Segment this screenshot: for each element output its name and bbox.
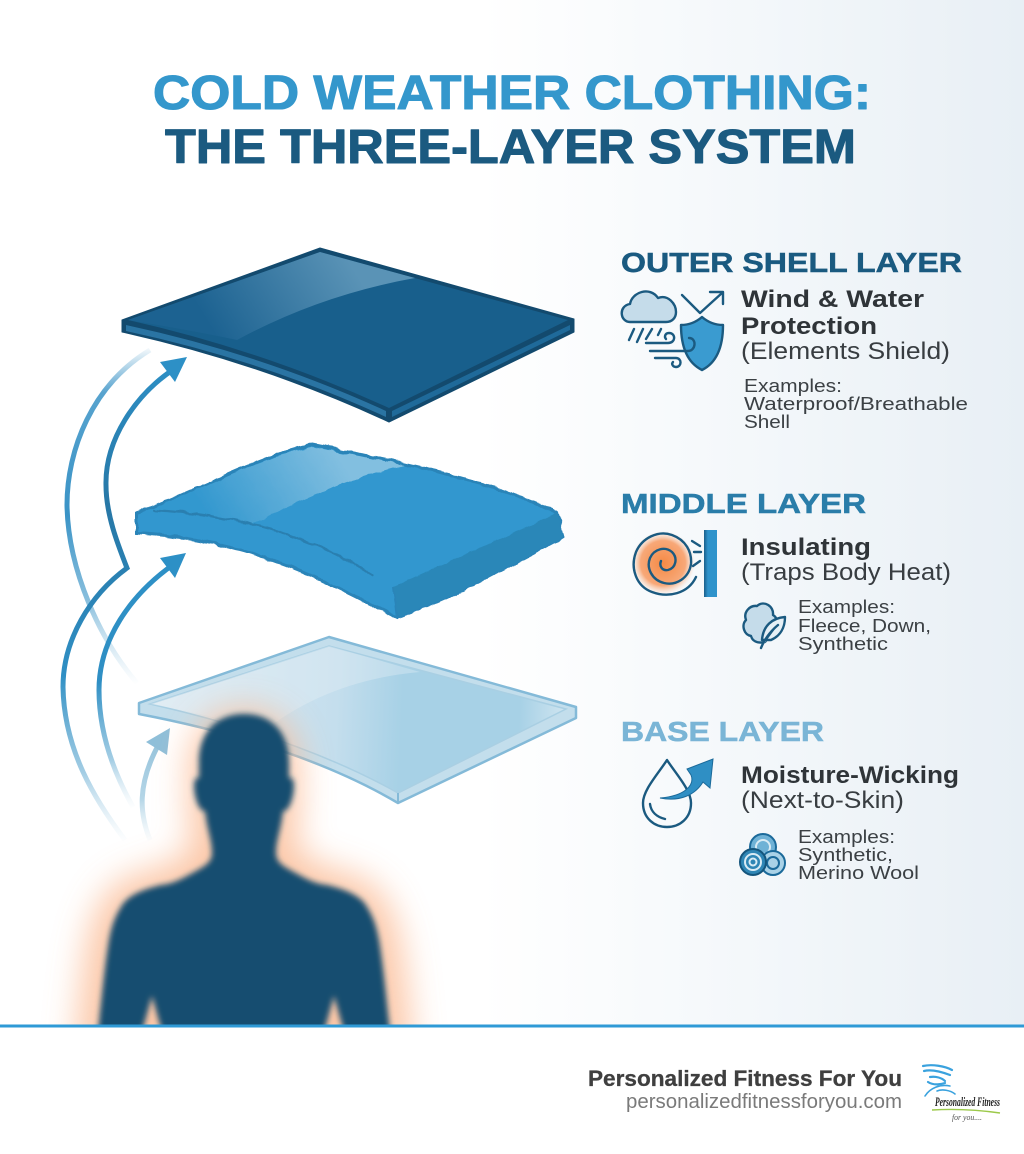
- description: (Traps Body Heat): [741, 559, 951, 586]
- examples: Shell: [744, 411, 790, 432]
- description: Moisture-Wicking: [741, 762, 959, 789]
- description: Protection: [741, 313, 877, 340]
- examples: Synthetic,: [798, 844, 893, 865]
- footer brand text: Personalized Fitness For You: [588, 1066, 902, 1091]
- icon: cloud, wind and shield: [622, 291, 723, 370]
- description: Wind & Water: [741, 286, 924, 313]
- examples: [798, 596, 931, 654]
- logo: for you....: [952, 1113, 982, 1122]
- description: (Elements Shield): [741, 338, 950, 365]
- heading: middle layer: MIDDLE LAYER: [621, 488, 866, 519]
- examples: Waterproof/Breathable: [744, 393, 968, 414]
- description: (Next-to-Skin): [741, 787, 904, 814]
- footer brand text: [588, 1066, 902, 1113]
- description: [741, 762, 959, 814]
- logo: [923, 1065, 1000, 1122]
- icon: moisture drop and arrow: [643, 759, 713, 827]
- description: [741, 286, 950, 365]
- panel: middle layer: [621, 488, 951, 654]
- icon: cotton and feather: [744, 604, 785, 648]
- examples: Examples:: [798, 826, 895, 847]
- examples: [744, 375, 968, 432]
- examples: Merino Wool: [798, 862, 919, 883]
- figure: body heat silhouette: [98, 714, 390, 1040]
- panel: base layer: [621, 716, 959, 883]
- title: [153, 67, 871, 174]
- base layer sheet: [139, 637, 576, 803]
- middle layer sheet: [137, 445, 563, 617]
- icon: wool rolls: [740, 834, 785, 875]
- arrows: layer flow: [63, 350, 187, 840]
- icon: heat spiral and barrier: [631, 530, 717, 597]
- examples: Examples:: [744, 375, 842, 396]
- examples: [798, 826, 919, 883]
- footer: [0, 1024, 1024, 1154]
- panel: outer shell layer: [621, 247, 968, 432]
- description: Insulating: [741, 534, 871, 561]
- examples: Examples:: [798, 596, 895, 617]
- title: COLD WEATHER CLOTHING:: [153, 67, 871, 120]
- footer brand text: personalizedfitnessforyou.com: [626, 1091, 902, 1113]
- examples: Synthetic: [798, 633, 888, 654]
- description: [741, 534, 951, 586]
- outer shell layer sheet: [122, 248, 574, 422]
- examples: Fleece, Down,: [798, 615, 931, 636]
- heading: base layer: BASE LAYER: [621, 716, 824, 747]
- title: THE THREE-LAYER SYSTEM: [165, 121, 856, 174]
- heading: outer shell layer: OUTER SHELL LAYER: [621, 247, 962, 278]
- arrow: base layer: [142, 728, 170, 840]
